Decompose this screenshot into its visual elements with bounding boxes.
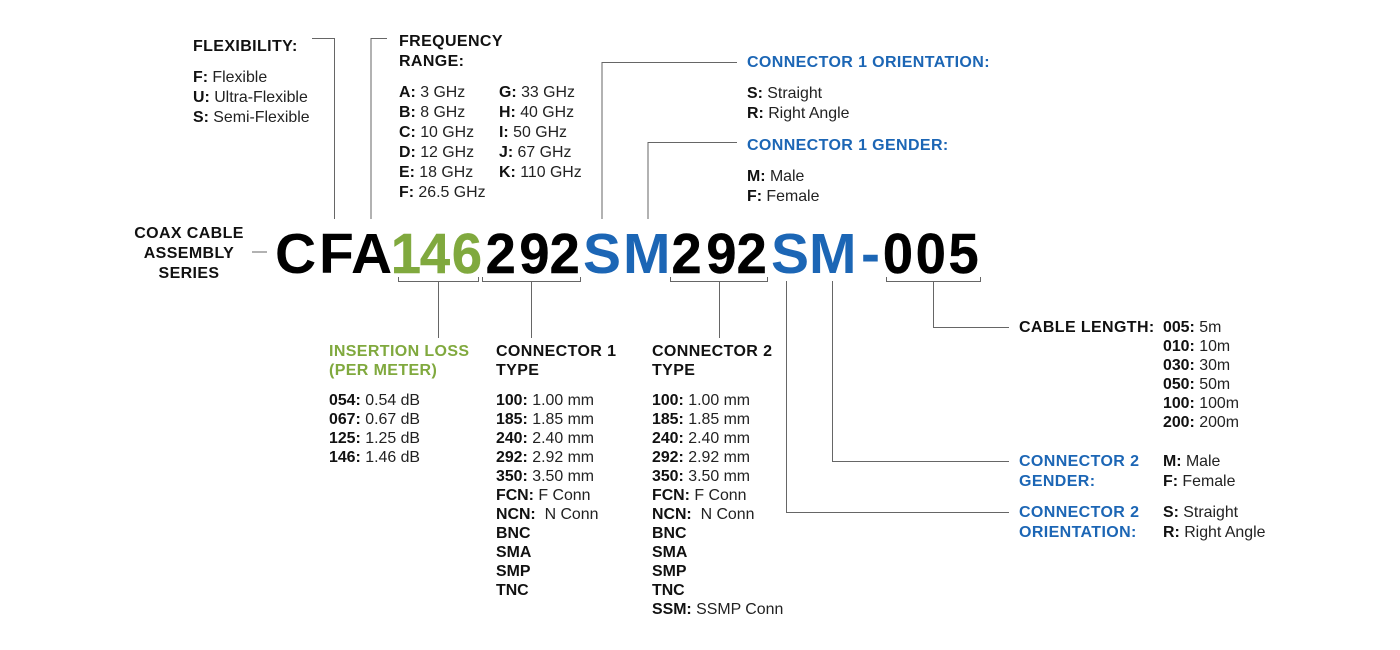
options: 350: 3.50 mm [652,468,750,485]
bracket: connector 1 type [482,277,580,338]
options: 200: 200m [1163,414,1239,431]
dash: - [861,222,880,286]
options: 100: 1.00 mm [496,392,594,409]
heading: FLEXIBILITY: [193,38,298,55]
options: 185: 1.85 mm [652,411,750,428]
label: coax cable assembly series [134,225,244,282]
options: NCN: N Conn [652,506,754,523]
options: FCN: F Conn [496,487,590,504]
options column 1: B: 8 GHz [399,104,465,121]
options: M: Male [747,168,805,185]
heading: CONNECTOR 1 GENDER: [747,137,949,154]
heading: TYPE [496,362,539,379]
heading: INSERTION LOSS [329,343,469,360]
part number [275,222,979,286]
options: M: Male [1163,453,1221,470]
heading: CABLE LENGTH: [1019,319,1155,336]
panel: flexibility [193,38,310,126]
options: 146: 1.46 dB [329,449,420,466]
connector 1 orientation and gender code SM: SM [583,222,670,286]
options: BNC [652,525,687,542]
options column 2: K: 110 GHz [499,164,582,181]
options: 030: 30m [1163,357,1230,374]
options: 240: 2.40 mm [496,430,594,447]
options: SMP [652,563,687,580]
options [1163,453,1236,490]
connector 1 type code 292: 292 [486,222,580,285]
panel: connector 1 orientation [747,54,990,122]
options: SMP [496,563,531,580]
connector: series [252,251,267,253]
options: TNC [496,582,529,599]
options [193,69,310,126]
panel: connector 1 type [496,343,616,599]
panel: connector 2 orientation [1019,504,1266,541]
options: 100: 100m [1163,395,1239,412]
options column 2: H: 40 GHz [499,104,574,121]
options: NCN: N Conn [496,506,598,523]
options: 100: 1.00 mm [652,392,750,409]
options: 054: 0.54 dB [329,392,420,409]
options: 350: 3.50 mm [496,468,594,485]
options: SMA [496,544,532,561]
heading: CONNECTOR 1 ORIENTATION: [747,54,990,71]
options [1163,504,1266,541]
options: 005: 5m [1163,319,1221,336]
panel: connector 2 type [652,343,783,618]
connector 2 type code 292: 292 [672,222,767,285]
panel: connector 1 gender [747,137,949,205]
heading: TYPE [652,362,695,379]
options column 1: C: 10 GHz [399,124,474,141]
options column 1: D: 12 GHz [399,144,474,161]
insertion loss code 146: 146 [391,222,482,285]
options: SMA [652,544,688,561]
heading [329,343,469,379]
options: U: Ultra-Flexible [193,89,308,106]
options column 2: J: 67 GHz [499,144,571,161]
options: F: Flexible [193,69,267,86]
series code CFA: CFA [275,222,392,286]
options [747,168,820,205]
options column 2: I: 50 GHz [499,124,567,141]
options: F: Female [747,188,820,205]
cable length code 005: 005 [883,222,979,285]
connector 2 orientation and gender code SM: SM [771,222,856,286]
options: 292: 2.92 mm [652,449,750,466]
connector: connector 2 gender [832,281,1009,462]
panel: insertion loss [329,343,469,466]
options: R: Right Angle [747,105,850,122]
connector: flexibility [312,38,334,219]
heading: CONNECTOR 2 [652,343,772,360]
options column 1: A: 3 GHz [399,84,465,101]
options column 2 [499,84,582,181]
options: TNC [652,582,685,599]
panel: connector 2 gender [1019,453,1236,490]
heading [399,33,503,70]
heading: ORIENTATION: [1019,524,1137,541]
heading [1019,453,1139,490]
options: 067: 0.67 dB [329,411,420,428]
options [496,392,598,599]
options: S: Semi-Flexible [193,109,310,126]
bracket: cable length [886,277,1009,328]
label: coax cable assembly series: COAX CABLE [134,225,244,242]
options: BNC [496,525,531,542]
panel: cable length [1019,319,1239,431]
options: SSM: SSMP Conn [652,601,783,618]
options: 292: 2.92 mm [496,449,594,466]
options column 1: E: 18 GHz [399,164,473,181]
options [747,85,850,122]
heading: RANGE: [399,53,464,70]
options: F: Female [1163,473,1236,490]
options [329,392,420,466]
options: FCN: F Conn [652,487,746,504]
bracket: connector 2 type [670,277,768,338]
options: S: Straight [1163,504,1239,521]
label: coax cable assembly series: ASSEMBLY [144,245,234,262]
heading: CONNECTOR 1 [496,343,616,360]
options: S: Straight [747,85,823,102]
heading: CONNECTOR 2 [1019,504,1139,521]
options column 2: G: 33 GHz [499,84,575,101]
connector: connector 1 orientation [602,62,737,219]
options column 1 [399,84,486,201]
options: 240: 2.40 mm [652,430,750,447]
heading: CONNECTOR 2 [1019,453,1139,470]
options: 125: 1.25 dB [329,430,420,447]
options: 050: 50m [1163,376,1230,393]
connector: connector 1 gender [648,142,737,219]
heading: FREQUENCY [399,33,503,50]
heading [652,343,772,379]
options: 185: 1.85 mm [496,411,594,428]
heading: GENDER: [1019,473,1095,490]
connector: frequency range [371,38,387,219]
connector: connector 2 orientation [786,281,1009,512]
panel: frequency range [399,33,582,201]
heading: (PER METER) [329,362,437,379]
options [652,392,783,618]
bracket: insertion loss [398,277,478,338]
heading [1019,504,1139,541]
label: coax cable assembly series: SERIES [159,265,219,282]
options [1163,319,1239,431]
options column 1: F: 26.5 GHz [399,184,486,201]
options: R: Right Angle [1163,524,1266,541]
heading [496,343,616,379]
options: 010: 10m [1163,338,1230,355]
